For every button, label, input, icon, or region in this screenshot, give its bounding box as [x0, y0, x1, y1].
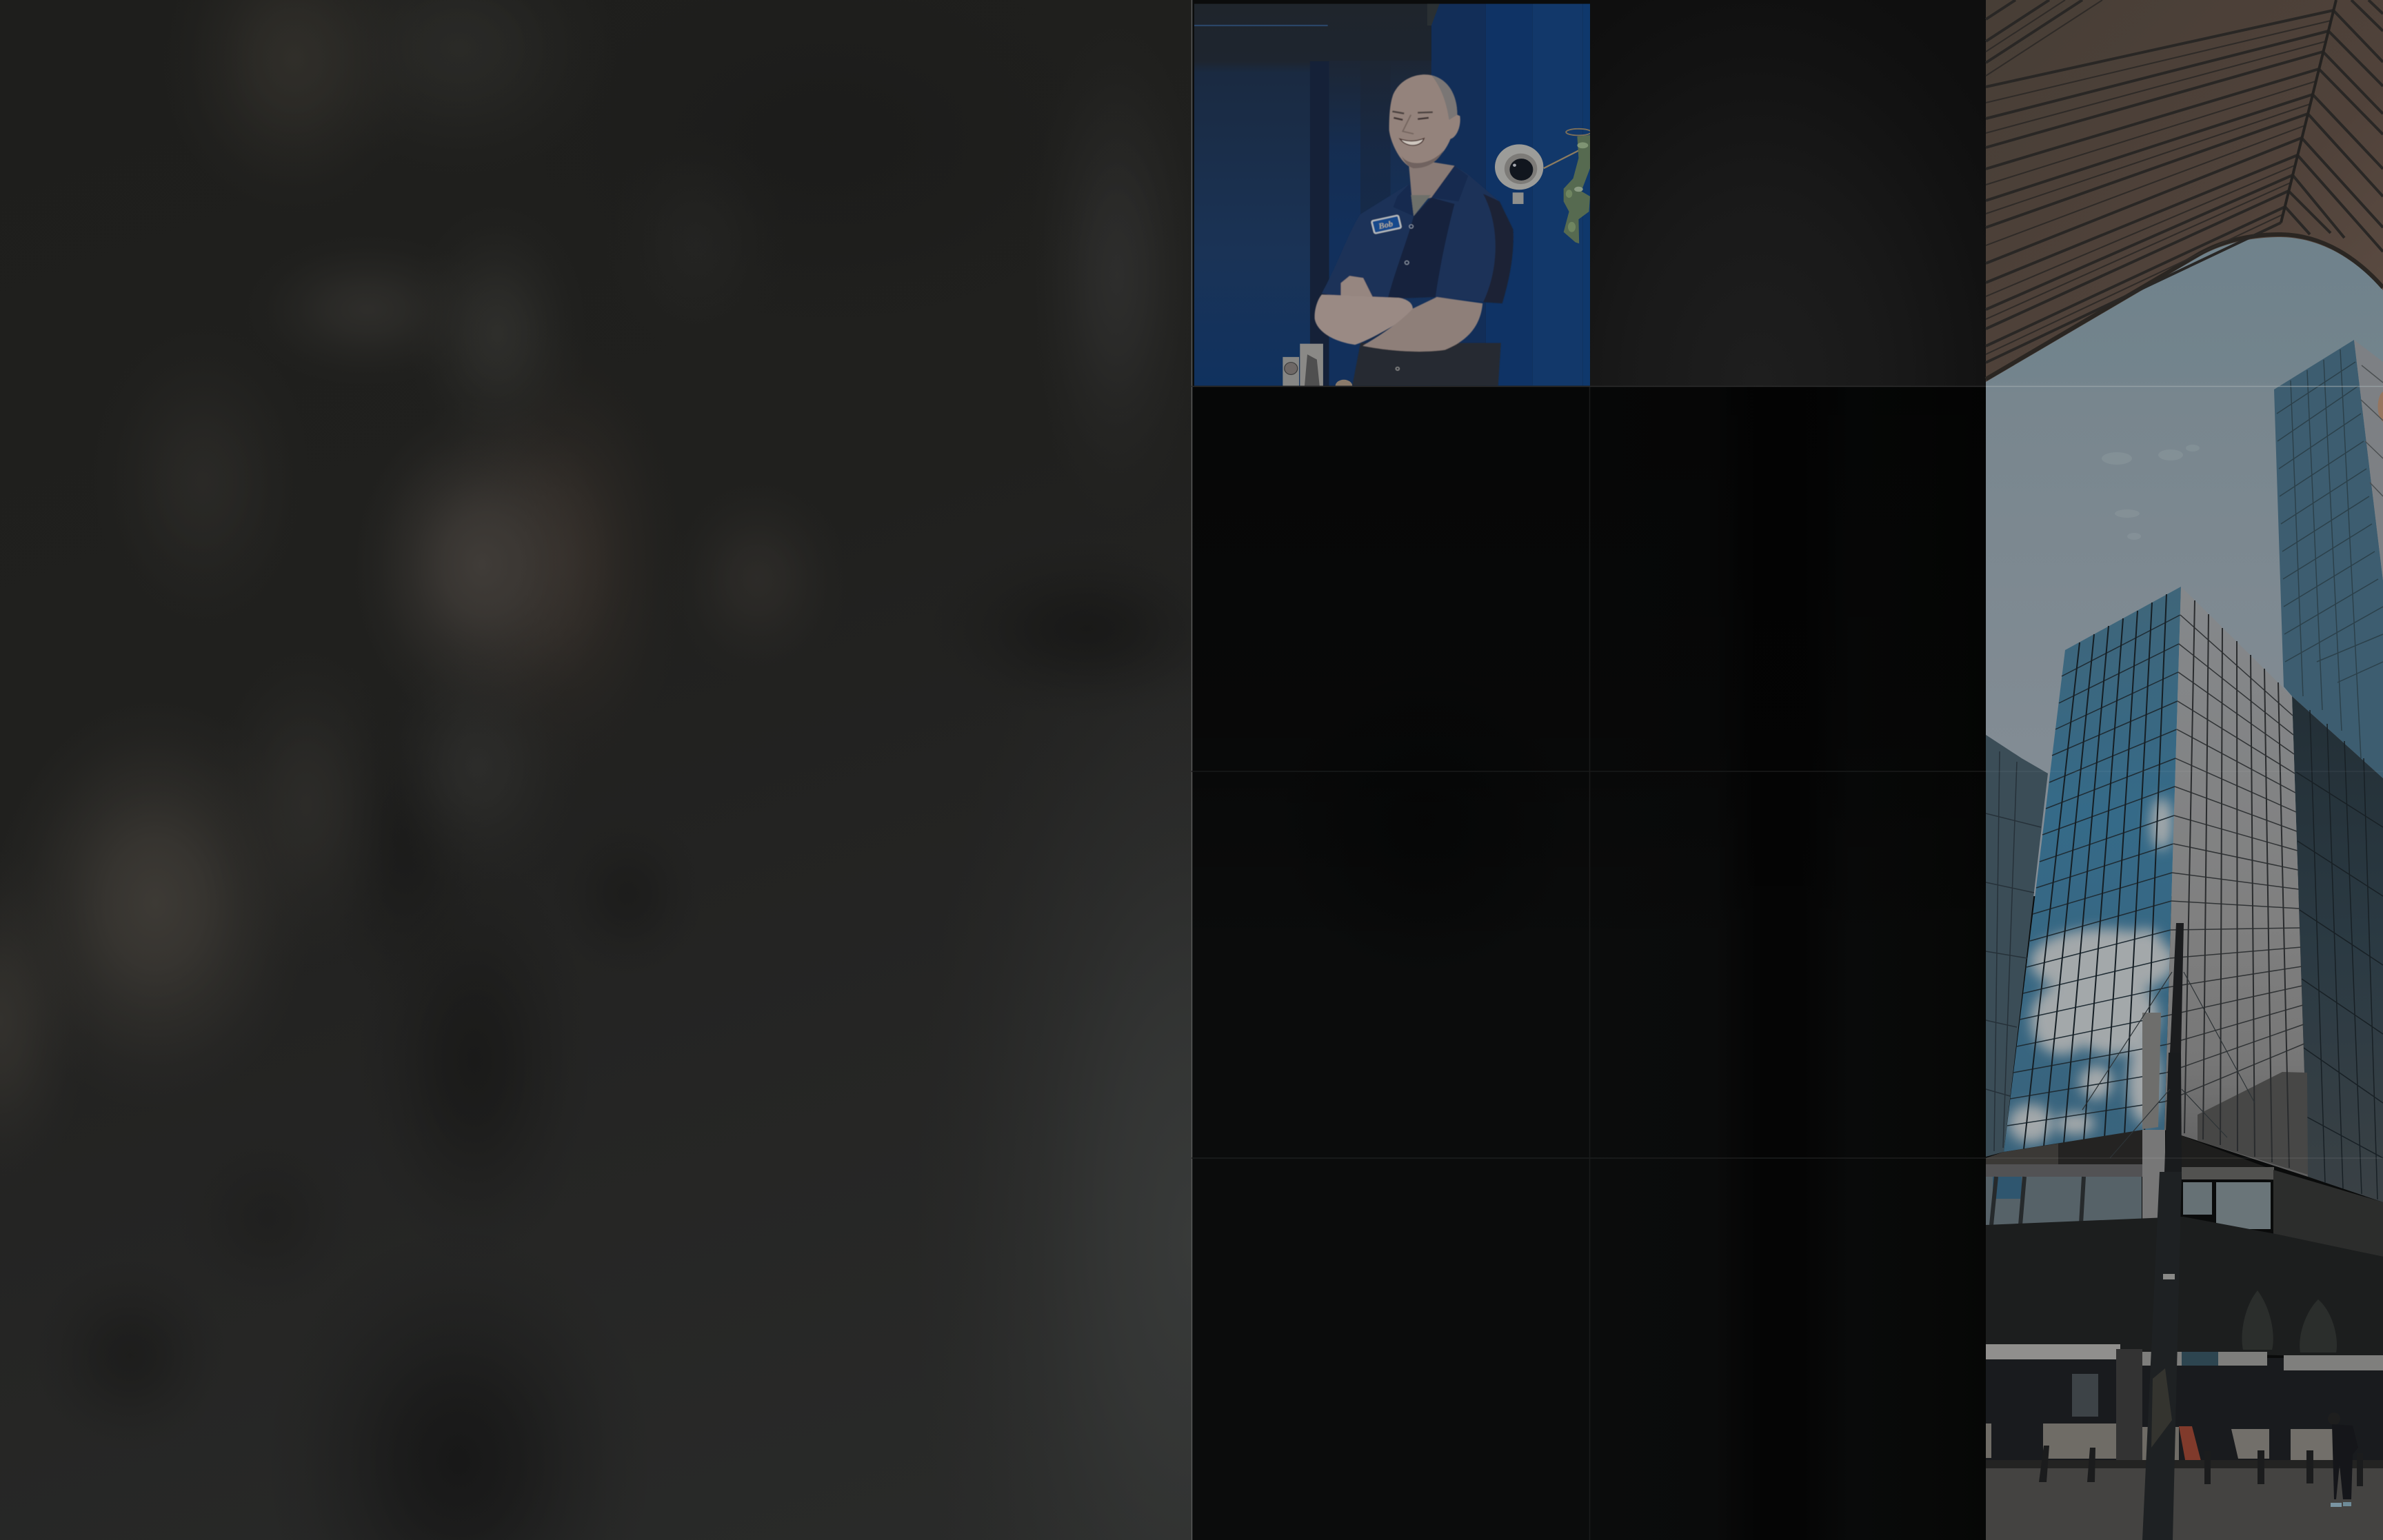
- panel: centre black grid: [1192, 0, 1986, 1540]
- trees: [2242, 1290, 2337, 1352]
- photo: Rotterdam towers under a wooden canopy: [1986, 0, 2383, 1540]
- left background building: [1986, 735, 2048, 1157]
- door and wall: [1194, 4, 1590, 386]
- sky clouds: [2102, 445, 2200, 540]
- lamp pole: [2082, 923, 2255, 1540]
- door locks and badge: [1283, 344, 1352, 386]
- front tower blue face with cloud reflections: [2004, 587, 2181, 1152]
- bollards: [2039, 1446, 2363, 1486]
- tower base and street-level glazing: [1986, 1130, 2383, 1358]
- man: Bob: [1377, 219, 1394, 231]
- pedestrian: [2328, 1412, 2358, 1507]
- wooden canopy: [1986, 0, 2383, 382]
- security camera: [1495, 144, 1581, 204]
- pavement: [1986, 1460, 2383, 1540]
- hanging plant: [1564, 129, 1591, 243]
- photo: man in blue work shirt: [1194, 4, 1591, 386]
- tall tower: [2274, 340, 2383, 778]
- front tower grey face: [2142, 587, 2308, 1177]
- right dark tower face: [2292, 696, 2383, 1202]
- panel: blurred left background: [0, 0, 1192, 1540]
- panel: empty top-right cell: [1590, 0, 1986, 386]
- man: [1315, 74, 1514, 386]
- grid lines: [1192, 0, 2383, 1540]
- tram: [1986, 1344, 2383, 1463]
